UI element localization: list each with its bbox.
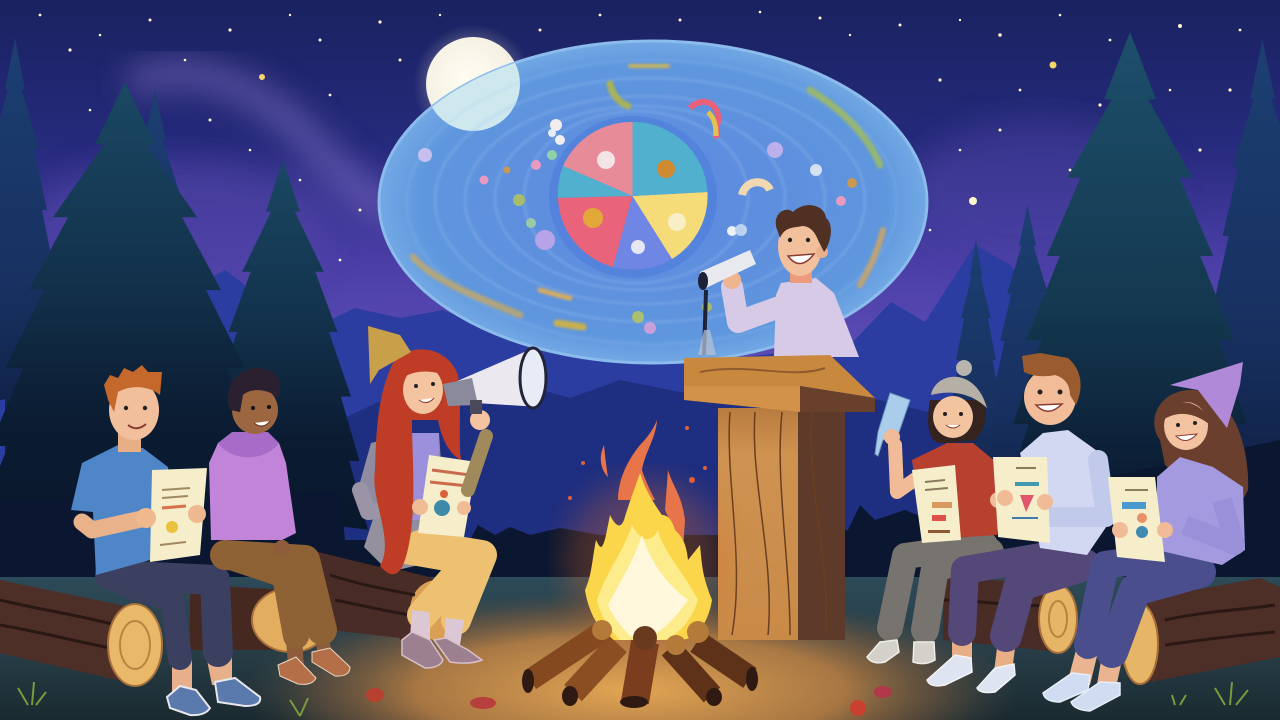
bottle <box>875 393 910 456</box>
log: left front <box>0 580 162 686</box>
ground <box>0 577 1280 720</box>
person: woman with purple party hat <box>1043 362 1248 711</box>
treeline <box>0 440 1280 600</box>
microphone <box>698 250 756 355</box>
podium <box>684 355 875 640</box>
person: teen in purple hoodie <box>209 368 350 684</box>
floating candies <box>418 102 857 334</box>
fire glow on ground <box>0 577 1280 720</box>
handout <box>418 455 477 537</box>
person: boy in blue shirt <box>71 365 260 715</box>
party hat <box>1170 362 1243 428</box>
log: right back <box>943 577 1077 653</box>
candies on ground <box>366 686 892 716</box>
candy arcs <box>742 182 770 195</box>
person: man in white shirt <box>927 353 1113 692</box>
campfire <box>522 420 758 708</box>
shoes <box>1043 673 1120 711</box>
handout <box>150 468 207 562</box>
person: girl in beanie <box>867 360 1006 664</box>
handout <box>993 457 1050 543</box>
moon <box>413 24 533 144</box>
grass tufts <box>18 682 1248 716</box>
shoes <box>278 648 350 684</box>
fire halo <box>565 480 725 640</box>
person: red-haired woman with megaphone <box>357 326 546 668</box>
handout <box>912 465 961 543</box>
ankles <box>1068 650 1122 692</box>
shoes <box>867 640 935 664</box>
log: left back <box>190 552 464 652</box>
person: presenter <box>698 205 859 357</box>
outer swirl accents <box>413 66 883 327</box>
shoes <box>167 678 260 715</box>
main left trees <box>0 82 368 602</box>
sky haze <box>30 74 1170 300</box>
handout <box>1108 477 1165 562</box>
embers <box>568 426 707 500</box>
far trees <box>0 38 1280 545</box>
ankles <box>952 635 1016 672</box>
party hat <box>368 326 411 384</box>
fire logs <box>530 632 750 702</box>
shoes <box>927 655 1015 692</box>
thought bubble <box>379 37 927 363</box>
near mountains <box>340 380 960 560</box>
megaphone <box>443 348 546 414</box>
pie chart <box>558 122 708 270</box>
log: right front <box>1122 578 1280 684</box>
stars <box>39 11 1241 261</box>
far mountains <box>0 245 1280 560</box>
main right tree <box>1000 32 1260 592</box>
socks <box>410 610 464 645</box>
moon through bubble <box>432 63 520 131</box>
flames <box>618 420 657 500</box>
shoes <box>402 632 482 668</box>
orbit rings <box>407 60 897 344</box>
pie icons <box>597 151 615 169</box>
